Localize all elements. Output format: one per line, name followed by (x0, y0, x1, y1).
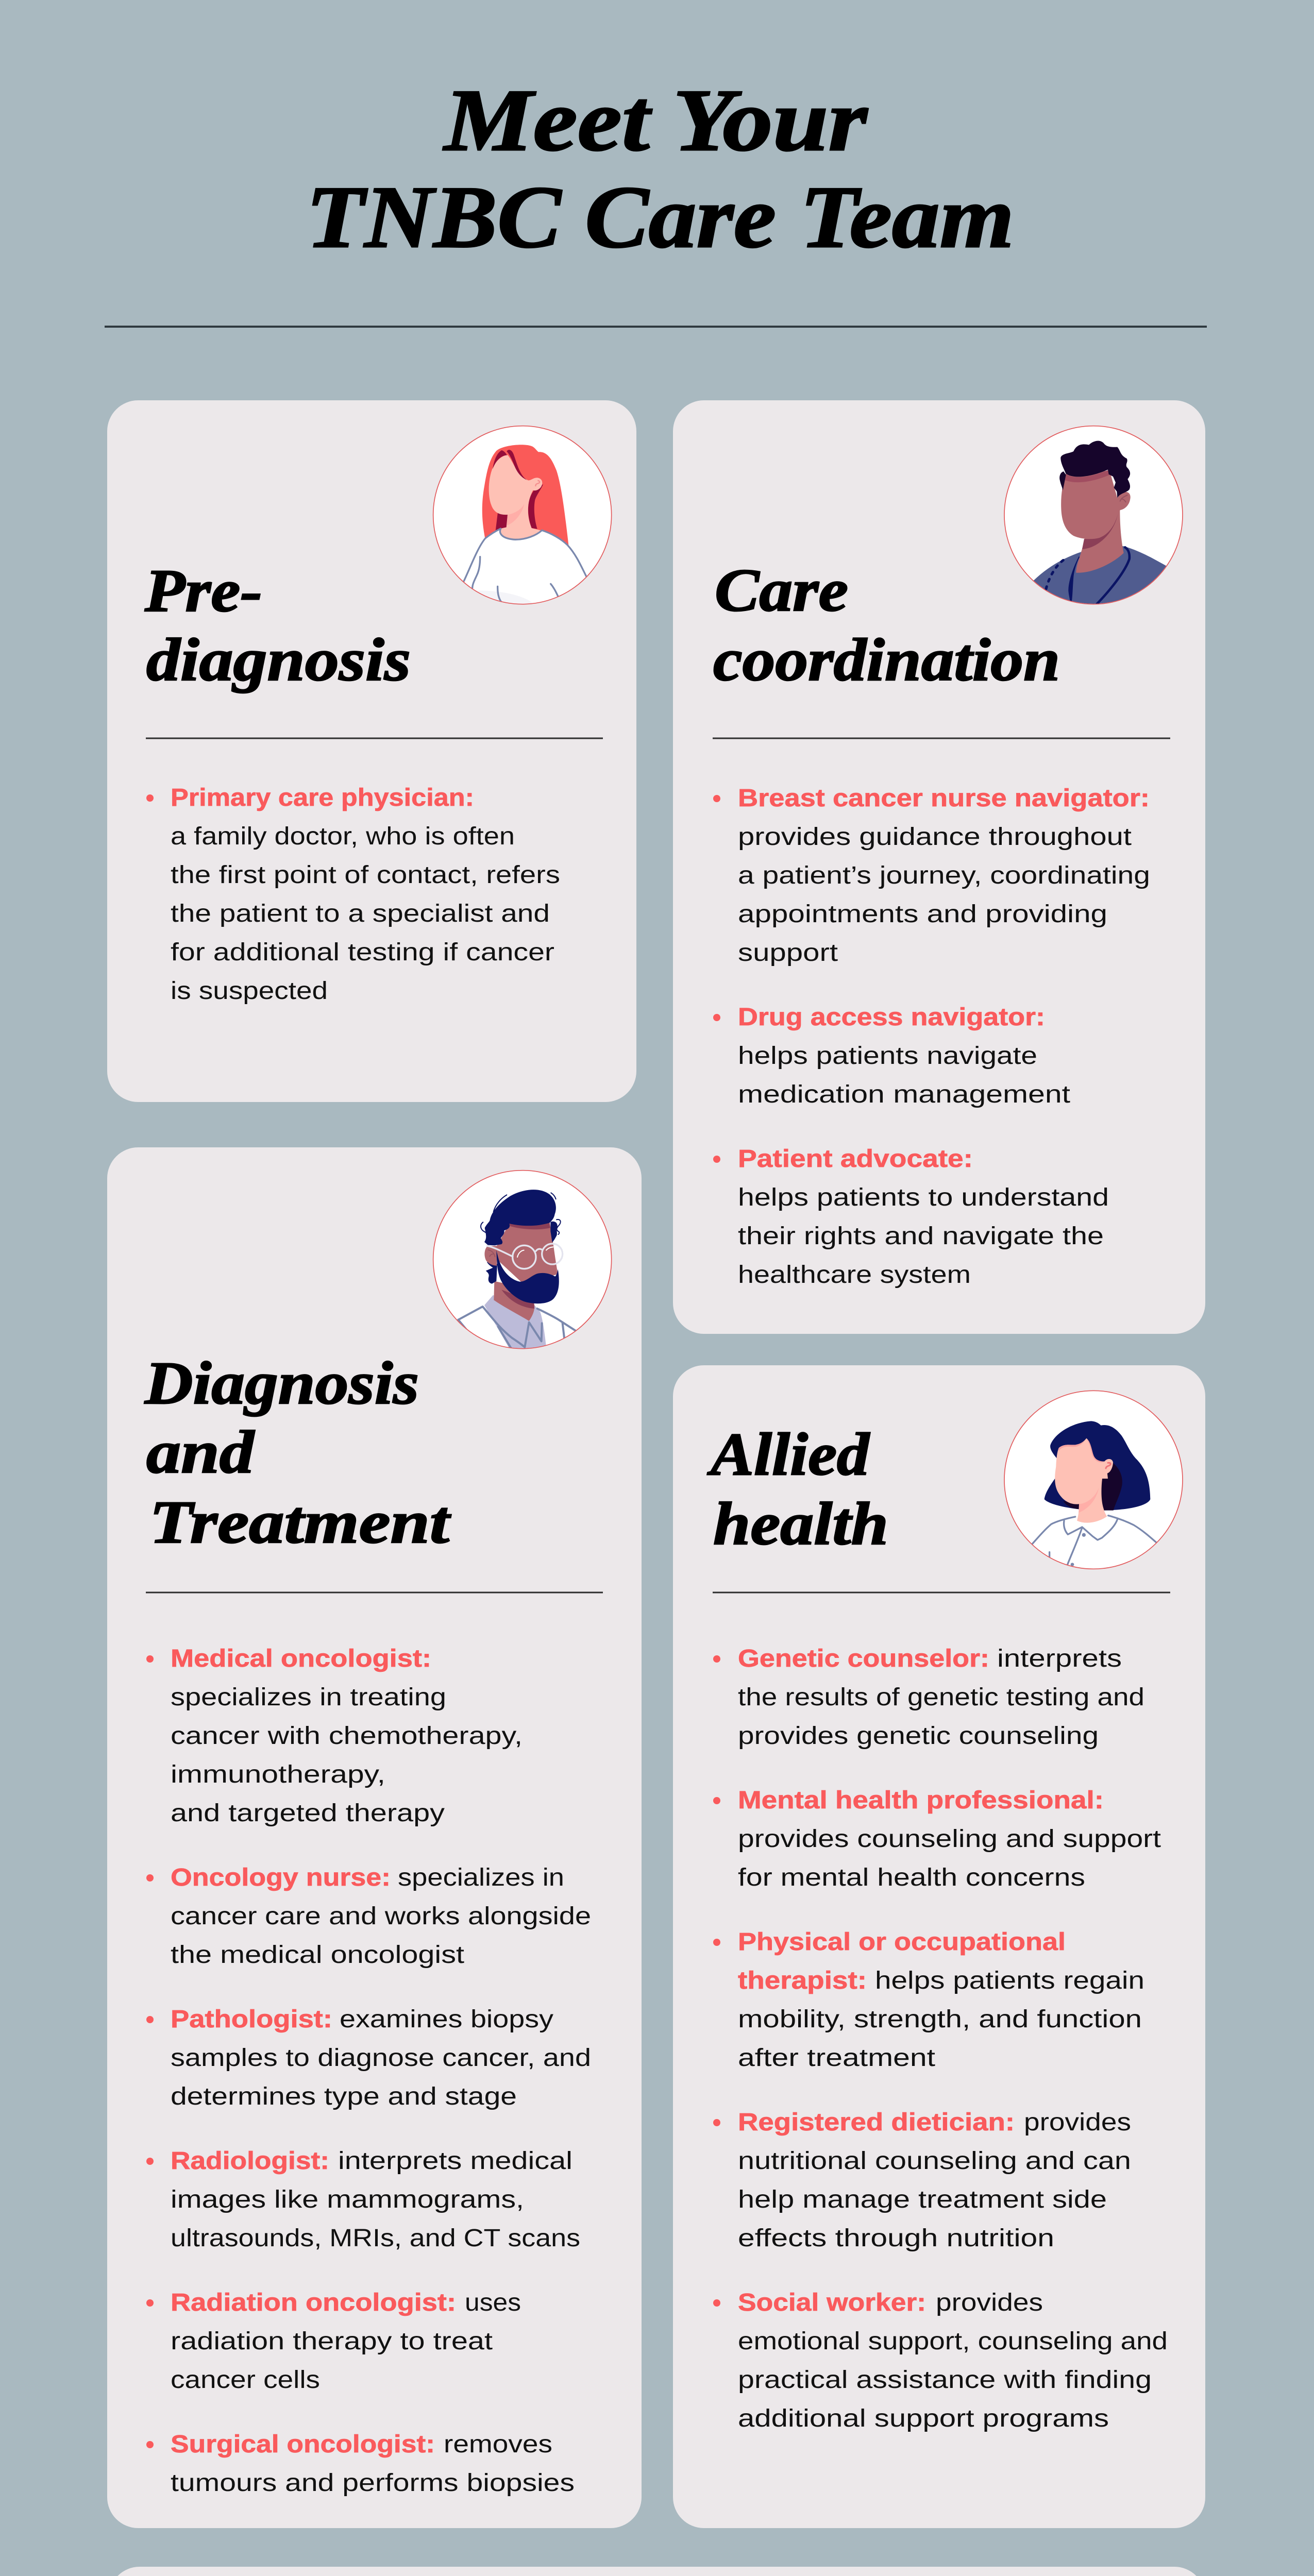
list item: physical or occupational therapist: mobility, strength, and function (738, 2006, 1142, 2033)
heading: care coordination (713, 556, 1060, 693)
list item: drug access navigator: helps patients navigate (738, 1042, 1037, 1070)
panel: pre-diagnosis (107, 400, 636, 1102)
list item: primary care physician: the patient to a specialist and (171, 900, 550, 927)
list item: breast cancer nurse navigator: support (738, 939, 838, 967)
list item: physical or occupational therapist: therapist: (738, 1967, 867, 1994)
list item: medical oncologist: immunotherapy, (171, 1761, 385, 1788)
heading: allied health: Allied (707, 1420, 870, 1488)
list item: radiologist: images like mammograms, (171, 2186, 524, 2213)
list item: registered dietician: help manage treatment side (738, 2186, 1107, 2213)
icon: woman with dark bob avatar (1004, 1391, 1183, 1582)
list item: primary care physician: a family doctor, who is often (171, 823, 515, 850)
list item: oncology nurse: cancer care and works alongside (171, 1903, 591, 1930)
list item: mental health professional: provides counseling and support (738, 1825, 1161, 1853)
list item: radiation oncologist (146, 2289, 521, 2394)
heading: pre-diagnosis (144, 557, 411, 693)
list item: breast cancer nurse navigator (713, 785, 1150, 967)
list item: patient advocate: helps patients to understand (738, 1184, 1109, 1211)
list item: pathologist: samples to diagnose cancer, and (171, 2044, 591, 2072)
list item: physical or occupational therapist: Physical or occupational (738, 1928, 1066, 1956)
icon: red-haired woman avatar (433, 426, 612, 618)
list item: patient advocate: healthcare system (738, 1261, 971, 1289)
list item: oncology nurse: the medical oncologist (171, 1941, 464, 1969)
list item: medical oncologist (146, 1645, 523, 1827)
list item: mental health professional (713, 1787, 1161, 1891)
list item: breast cancer nurse navigator: Breast cancer nurse navigator: (738, 785, 1150, 812)
list item: radiation oncologist: uses (465, 2289, 521, 2316)
heading: diagnosis and treatment: and (146, 1418, 255, 1486)
list item: surgical oncologist: Surgical oncologist: (171, 2431, 435, 2458)
list item: registered dietician: provides (1024, 2109, 1131, 2136)
list item: drug access navigator: medication management (738, 1081, 1070, 1108)
heading: pre-diagnosis: Pre- (144, 557, 262, 624)
icon: curly-haired man avatar (1004, 426, 1183, 618)
list item: drug access navigator: Drug access navigator: (738, 1004, 1045, 1031)
list item: patient advocate: their rights and navigate the (738, 1223, 1104, 1250)
list item: genetic counselor (713, 1645, 1144, 1750)
list item: social worker: practical assistance with finding (738, 2366, 1152, 2394)
list item: primary care physician: Primary care physician: (171, 784, 474, 811)
list item: registered dietician: Registered dietician: (738, 2109, 1015, 2136)
list item: radiation oncologist: radiation therapy to treat (171, 2328, 493, 2355)
list item: surgical oncologist (146, 2431, 575, 2497)
title (306, 72, 1014, 266)
heading: care coordination: coordination (713, 626, 1060, 693)
list item: mental health professional: Mental health professional: (738, 1787, 1104, 1814)
heading: diagnosis and treatment: Diagnosis (144, 1349, 419, 1417)
list item: breast cancer nurse navigator: appointments and providing (738, 901, 1107, 928)
list item: genetic counselor: the results of genetic testing and (738, 1684, 1144, 1711)
list item: pathologist: Pathologist: (171, 2006, 332, 2033)
list item: medical oncologist: specializes in treating (171, 1684, 446, 1711)
list item: pathologist: determines type and stage (171, 2083, 517, 2110)
icon: bearded man with glasses avatar (433, 1171, 612, 1350)
panel: diagnosis and treatment (107, 1147, 642, 2528)
list item: social worker: emotional support, counseling and (738, 2328, 1168, 2355)
list item: primary care physician: the first point of contact, refers (171, 861, 560, 889)
list item: pathologist (146, 2006, 591, 2110)
heading: allied health: health (713, 1490, 888, 1557)
panel: additional care (109, 2567, 1205, 2576)
list item: radiologist: ultrasounds, MRIs, and CT scans (171, 2225, 580, 2252)
list item: physical or occupational therapist: after treatment (738, 2044, 935, 2072)
title: TNBC Care Team (306, 168, 1014, 266)
list item: genetic counselor: Genetic counselor: (738, 1645, 989, 1672)
list item: registered dietician: nutritional counseling and can (738, 2147, 1131, 2175)
list item: registered dietician: effects through nutrition (738, 2225, 1054, 2252)
list item: registered dietician (713, 2109, 1131, 2252)
list item: mental health professional: for mental health concerns (738, 1864, 1085, 1891)
heading: care coordination: Care (715, 556, 848, 624)
heading: diagnosis and treatment: Treatment (149, 1488, 451, 1556)
list item: pathologist: examines biopsy (340, 2006, 553, 2033)
list item: genetic counselor: interprets (997, 1645, 1122, 1672)
list item: genetic counselor: provides genetic counseling (738, 1722, 1099, 1750)
list item: radiologist (146, 2147, 580, 2252)
list item: medical oncologist: and targeted therapy (171, 1800, 445, 1827)
list item: oncology nurse: Oncology nurse: (171, 1864, 391, 1891)
list item: physical or occupational therapist: helps patients regain (875, 1967, 1144, 1994)
heading: pre-diagnosis: diagnosis (146, 626, 411, 693)
heading: diagnosis and treatment (144, 1349, 451, 1556)
list item: radiologist: Radiologist: (171, 2147, 329, 2175)
list item: oncology nurse (146, 1864, 591, 1969)
list item: breast cancer nurse navigator: provides guidance throughout (738, 823, 1132, 851)
list item: oncology nurse: specializes in (398, 1864, 564, 1891)
list item: primary care physician (146, 784, 560, 1005)
list item: radiologist: interprets medical (338, 2147, 572, 2175)
list item: surgical oncologist: removes (444, 2431, 552, 2458)
list item: breast cancer nurse navigator: a patient’s journey, coordinating (738, 862, 1150, 889)
heading: allied health (707, 1420, 888, 1557)
list item: medical oncologist: cancer with chemotherapy, (171, 1722, 523, 1750)
panel: allied health (673, 1365, 1205, 2528)
list item: physical or occupational therapist (713, 1928, 1144, 2072)
list item: drug access navigator (713, 1004, 1070, 1108)
list item: patient advocate (713, 1145, 1109, 1289)
list item: primary care physician: is suspected (171, 977, 328, 1005)
panel: care coordination (673, 400, 1205, 1334)
list item: surgical oncologist: tumours and performs biopsies (171, 2469, 575, 2497)
title: Meet Your (443, 72, 868, 170)
list item: radiation oncologist: cancer cells (171, 2366, 320, 2394)
list item: medical oncologist: Medical oncologist: (171, 1645, 431, 1672)
list item: social worker: additional support programs (738, 2405, 1109, 2432)
list item: social worker: provides (936, 2289, 1043, 2316)
list item: social worker: Social worker: (738, 2289, 926, 2316)
list item: primary care physician: for additional testing if cancer (171, 939, 554, 966)
list item: patient advocate: Patient advocate: (738, 1145, 973, 1173)
list item: social worker (713, 2289, 1168, 2432)
list item: radiation oncologist: Radiation oncologist: (171, 2289, 456, 2316)
